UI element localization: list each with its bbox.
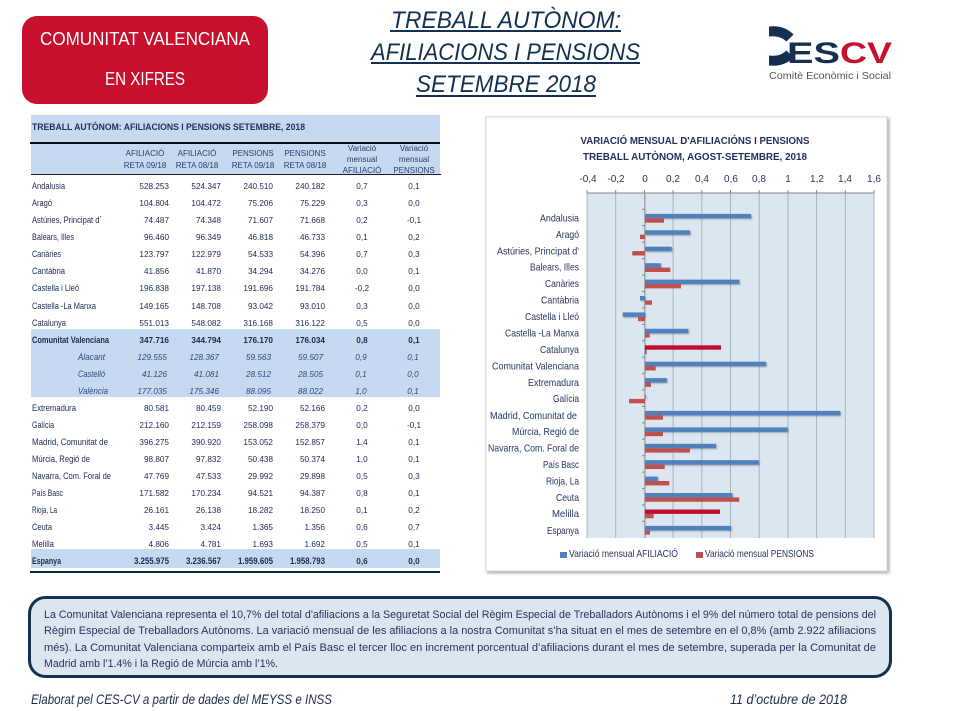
row: Comunitat Valenciana: Comunitat Valenciana (32, 335, 110, 345)
row: Alacant (77, 352, 419, 362)
row: Aragó: 75.229 (300, 199, 325, 208)
category labels: Galícia (553, 393, 579, 405)
row: País Basc: País Basc (32, 488, 63, 498)
category labels (488, 212, 579, 537)
row: Balears (32, 232, 420, 242)
row: País Basc: 94.521 (248, 489, 273, 498)
row: Melilla: Melilla (32, 539, 54, 549)
table column headers: RETA 08/18 (284, 161, 327, 170)
table title band (30, 115, 440, 144)
row: Comunitat Valenciana: 176.170 (243, 336, 273, 345)
highlighted bars: Catalunya and Melilla (645, 345, 721, 514)
row: València: 0,1 (407, 387, 419, 396)
category labels: Rioja, La (546, 476, 579, 488)
plot area with gridlines (587, 190, 874, 538)
category labels: Balears, Illes (530, 262, 579, 274)
row: Astúries: -0,1 (407, 216, 422, 225)
row: Castelló: Castelló (78, 369, 105, 379)
x axis labels: 0,6 (724, 174, 738, 185)
row: Múrcia: 1,0 (356, 455, 368, 464)
row: Astúries: 71.668 (300, 216, 325, 225)
row: Balears: 0,1 (356, 233, 368, 242)
highlight band: Comunitat Valenciana (31, 329, 440, 397)
table column headers: PENSIONS (232, 149, 274, 158)
row: Galícia: Galícia (32, 420, 54, 430)
row: Comunitat Valenciana: 344.794 (191, 336, 221, 345)
row: Aragó (32, 198, 420, 208)
row: Alacant: 0,1 (407, 353, 419, 362)
row: Alacant: 59.563 (246, 353, 271, 362)
row: Canàries: Canàries (32, 249, 61, 259)
row: Comunitat Valenciana: 0,8 (356, 336, 368, 345)
table column headers: AFILIACIÓ (126, 149, 164, 158)
x axis labels: 0,8 (752, 174, 766, 185)
row: Múrcia: Múrcia, Regió de (32, 454, 90, 464)
row: Cantàbria: 0,0 (356, 267, 368, 276)
region badge: Comunitat Valenciana en xifres: COMUNITAT VALENCIANA (40, 29, 250, 49)
logo: CES-CV: ES (787, 37, 840, 70)
logo: CES-CV (766, 31, 892, 82)
row: Balears: Balears, Illes (32, 232, 74, 242)
row: Castella-La Manxa: 93.042 (248, 302, 273, 311)
commentary panel: més). La Comunitat Valenciana comparteix amb el País Basc el tercer lloc en increment porcentual d’afiliacions durant el mes de setembre, superada per la Comunitat de (44, 642, 876, 654)
row: Castella i Lleó: 197.138 (191, 284, 221, 293)
row: Extremadura (32, 403, 420, 413)
row: Espanya: 1.958.793 (290, 556, 325, 566)
region badge: Comunitat Valenciana en xifres: EN XIFRES (105, 69, 185, 89)
x axis labels: 0,2 (666, 174, 680, 185)
category labels: Cantàbria (541, 294, 579, 306)
row: Melilla: 4.781 (200, 540, 221, 549)
row: Andalusia: 240.182 (295, 182, 325, 191)
row: Cantàbria: 0,1 (408, 267, 420, 276)
row: Ceuta (32, 522, 420, 532)
row: Navarra: 29.898 (300, 472, 325, 481)
row: Madrid: 390.920 (191, 438, 221, 447)
row: Castelló: 28.505 (297, 370, 323, 379)
row: Castelló: 41.126 (142, 370, 167, 379)
row: Navarra: Navarra, Com. Foral de (32, 471, 111, 481)
row: Cantàbria: 34.294 (248, 267, 273, 276)
row: Extremadura: 80.581 (144, 404, 169, 413)
row: Aragó: 0,3 (356, 199, 368, 208)
row: Balears: 96.460 (144, 233, 169, 242)
row: Navarra: 29.992 (248, 472, 273, 481)
row: Melilla: 1.693 (252, 540, 273, 549)
category labels: Ceuta (556, 492, 579, 504)
table column headers: Variació (400, 144, 429, 153)
title: AFILIACIONS I PENSIONS (369, 39, 640, 66)
category labels: Madrid, Comunitat de (490, 410, 577, 422)
row: Andalusia: 524.347 (191, 182, 221, 191)
table column headers: mensual (347, 155, 377, 164)
row: Castelló: 0,0 (407, 370, 419, 379)
table column headers: PENSIONS (393, 166, 435, 175)
table column headers: PENSIONS (284, 149, 326, 158)
category labels: Astúries, Principat d' (497, 246, 579, 258)
row: Madrid (32, 437, 420, 447)
row: Balears: 46.733 (300, 233, 325, 242)
row: Rioja: Rioja, La (32, 505, 57, 515)
row: Alacant: Alacant (77, 352, 105, 362)
row: Galícia (32, 420, 422, 430)
row: Castella i Lleó (32, 283, 420, 293)
row: Castella-La Manxa: 93.010 (300, 302, 325, 311)
row: Castelló: 28.512 (245, 370, 271, 379)
row: Canàries (32, 249, 420, 259)
x axis labels (579, 174, 881, 185)
row: Ceuta: Ceuta (32, 522, 52, 532)
row: Galícia: 0,0 (356, 421, 368, 430)
row: Catalunya: 548.082 (191, 319, 221, 328)
row: Extremadura: 80.459 (196, 404, 221, 413)
row: País Basc: 94.387 (300, 489, 325, 498)
title (369, 7, 640, 98)
table column headers: Variació (348, 144, 377, 153)
row: Madrid: 0,1 (408, 438, 420, 447)
row: Cantàbria: Cantàbria (32, 266, 65, 276)
row: Cantàbria (32, 266, 420, 276)
row: Catalunya: 0,5 (356, 319, 368, 328)
row: Canàries: 123.797 (139, 250, 169, 259)
row: País Basc: 170.234 (191, 489, 221, 498)
commentary panel (30, 598, 890, 676)
row: Canàries: 0,3 (408, 250, 420, 259)
row: Navarra: 47.769 (144, 472, 169, 481)
table title band: TREBALL AUTÒNOM: AFILIACIONS I PENSIONS SETEMBRE, 2018 (32, 121, 305, 132)
row: Castella-La Manxa: 149.165 (139, 302, 169, 311)
row: Madrid: 153.052 (243, 438, 273, 447)
category labels: Múrcia, Regió de (512, 426, 579, 438)
row: Rioja (32, 505, 420, 515)
x axis labels: -0,2 (607, 174, 625, 185)
title: TREBALL AUTÒNOM: (391, 7, 621, 34)
row: Cantàbria: 41.856 (144, 267, 169, 276)
row: Galícia: -0,1 (407, 421, 422, 430)
row: Espanya: 0,6 (356, 557, 368, 566)
row: Alacant: 128.367 (189, 353, 219, 362)
row: Galícia: 212.160 (139, 421, 169, 430)
row: Catalunya: 551.013 (139, 319, 169, 328)
row: Aragó: 104.472 (191, 199, 221, 208)
row: Comunitat Valenciana: 0,1 (408, 336, 420, 345)
row: Espanya: 3.255.975 (134, 556, 169, 566)
row: Múrcia: 50.374 (300, 455, 325, 464)
category labels: Comunitat Valenciana (492, 360, 579, 372)
row: Rioja: 18.282 (248, 506, 273, 515)
chart title (580, 134, 810, 163)
row: Ceuta: 0,7 (408, 523, 420, 532)
commentary panel: Règim Especial de Treballadors Autònoms. La variació mensual de les afiliacions a la nostra Comunitat s’ha situat en el mes de setembre en el 0,8% (amb 2.922 afiliacions (44, 625, 876, 637)
row: Melilla: 0,5 (356, 540, 368, 549)
logo: CES-CV: Comitè Econòmic i Social (769, 70, 891, 82)
x axis labels: 1 (785, 174, 791, 185)
row: Balears: 46.818 (248, 233, 273, 242)
row: Ceuta: 1.356 (304, 523, 325, 532)
bar chart panel (486, 117, 887, 571)
row: Rioja: 0,2 (408, 506, 420, 515)
table column headers: mensual (399, 155, 429, 164)
row: Astúries: 74.348 (196, 216, 221, 225)
bars: variació mensual afiliació (623, 214, 840, 530)
row: Andalusia: 0,1 (408, 182, 420, 191)
row: Andalusia: 528.253 (139, 182, 169, 191)
row: Rioja: 26.138 (196, 506, 221, 515)
row: Melilla: 0,1 (408, 540, 420, 549)
row: Ceuta: 0,6 (356, 523, 368, 532)
row: València: València (78, 386, 108, 396)
row: Navarra (32, 471, 420, 481)
row: Astúries (32, 215, 422, 225)
row: València: 1,0 (355, 387, 367, 396)
row: Castella i Lleó: -0,2 (355, 284, 370, 293)
category labels: Castella i Lleó (525, 311, 579, 323)
row: Andalusia (32, 181, 420, 191)
row: Galícia: 258.098 (243, 421, 273, 430)
row: Ceuta: 1.365 (252, 523, 273, 532)
category labels: País Basc (543, 459, 579, 471)
row: Alacant: 59.507 (298, 353, 323, 362)
row: Canàries: 54.533 (248, 250, 273, 259)
x axis labels: -0,4 (579, 174, 597, 185)
row: Andalusia: 0,7 (356, 182, 368, 191)
table column headers: RETA 09/18 (124, 161, 167, 170)
row: Castella-La Manxa: 148.708 (191, 302, 221, 311)
row: Castella i Lleó: 191.696 (243, 284, 273, 293)
row: Navarra: 47.533 (196, 472, 221, 481)
row: Navarra: 0,5 (356, 472, 368, 481)
row: Extremadura: 52.166 (300, 404, 325, 413)
row: Canàries: 0,7 (356, 250, 368, 259)
highlight band: Espanya (31, 549, 440, 568)
row: Espanya: Espanya (32, 556, 62, 566)
row: Extremadura: 52.190 (248, 404, 273, 413)
data table (30, 115, 441, 573)
x axis labels: 0,4 (695, 174, 709, 185)
logo: CES-CV: CV (840, 37, 892, 70)
category labels: Navarra, Com. Foral de (488, 442, 579, 454)
row: Ceuta: 3.424 (200, 523, 221, 532)
row: Astúries: 71.607 (248, 216, 273, 225)
row: Castella-La Manxa: 0,0 (408, 302, 420, 311)
row: País Basc: 0,8 (356, 489, 368, 498)
row: Galícia: 212.159 (191, 421, 221, 430)
row: València: 177.035 (137, 387, 167, 396)
row: Aragó: Aragó (32, 198, 52, 208)
row: Balears: 0,2 (408, 233, 420, 242)
chart title: TREBALL AUTÒNOM, AGOST-SETEMBRE, 2018 (583, 150, 807, 163)
row: Cantàbria: 34.276 (300, 267, 325, 276)
row: Castella-La Manxa: Castella -La Manxa (32, 301, 96, 311)
legend (560, 547, 814, 560)
row: Espanya: 0,0 (408, 557, 420, 566)
row: Catalunya: 0,0 (408, 319, 420, 328)
row: Castelló: 41.081 (194, 370, 219, 379)
category labels: Andalusia (540, 212, 579, 224)
row: Espanya: 3.236.567 (186, 556, 221, 566)
bottom rule (30, 571, 440, 573)
row: Comunitat Valenciana: 176.034 (295, 336, 325, 345)
row: Cantàbria: 41.870 (196, 267, 221, 276)
row: Espanya: 1.959.605 (238, 556, 273, 566)
row: Múrcia: 50.438 (248, 455, 273, 464)
row: Catalunya: Catalunya (32, 318, 66, 328)
row: València: 88.022 (298, 387, 323, 396)
row: Astúries: 74.487 (144, 216, 169, 225)
row: Melilla (32, 539, 420, 549)
row: Navarra: 0,3 (408, 472, 420, 481)
row: Castella i Lleó: 0,0 (408, 284, 420, 293)
row: València: 175.346 (189, 387, 219, 396)
x axis labels: 1,4 (838, 174, 852, 185)
row: Catalunya (32, 318, 420, 328)
row: País Basc: 0,1 (408, 489, 420, 498)
x axis labels: 1,6 (867, 174, 881, 185)
row: Astúries: 0,2 (356, 216, 368, 225)
row: Aragó: 104.804 (139, 199, 169, 208)
footer: date: 11 d’octubre de 2018 (730, 691, 847, 707)
row: Múrcia (32, 454, 420, 464)
category labels: Catalunya (540, 344, 579, 356)
row: Balears: 96.349 (196, 233, 221, 242)
row: Melilla: 4.806 (148, 540, 169, 549)
row: València: 88.095 (246, 387, 271, 396)
table column headers: AFILIACIÓ (178, 149, 216, 158)
row: Madrid: 396.275 (139, 438, 169, 447)
legend: Variació mensual PENSIONS (705, 548, 814, 560)
table column headers: RETA 09/18 (232, 161, 275, 170)
category labels: Castella -La Manxa (505, 328, 579, 340)
row: Alacant: 129.555 (137, 353, 167, 362)
row: Aragó: 0,0 (408, 199, 420, 208)
row: Rioja: 0,1 (356, 506, 368, 515)
category labels: Melilla (552, 508, 579, 520)
row: Comunitat Valenciana: 347.716 (139, 336, 169, 345)
row: Madrid: Madrid, Comunitat de (32, 437, 108, 447)
footer: source: Elaborat pel CES-CV a partir de dades del MEYSS e INSS (31, 691, 333, 707)
legend: Variació mensual AFILIACIÓ (569, 547, 678, 560)
table column headers: RETA 08/18 (176, 161, 219, 170)
category labels: Extremadura (528, 377, 579, 389)
row: Alacant: 0,9 (355, 353, 367, 362)
row: Extremadura: 0,0 (408, 404, 420, 413)
row: Madrid: 1,4 (356, 438, 368, 447)
row: Castella i Lleó: 191.784 (295, 284, 325, 293)
row: Castella-La Manxa: 0,3 (356, 302, 368, 311)
row: Catalunya: 316.168 (243, 319, 273, 328)
bars: variació mensual pensions (629, 218, 739, 535)
row: Comunitat Valenciana (32, 335, 420, 345)
region badge: Comunitat Valenciana en xifres (22, 16, 268, 104)
row: Castelló: 0,1 (355, 370, 367, 379)
row: Rioja: 18.250 (300, 506, 325, 515)
row: Castella-La Manxa (32, 301, 420, 311)
row: Andalusia: 240.510 (243, 182, 273, 191)
category labels: Canàries (545, 278, 579, 290)
row: Galícia: 258.379 (295, 421, 325, 430)
row: Múrcia: 98.807 (144, 455, 169, 464)
x axis labels: 0 (642, 174, 648, 185)
row: Canàries: 54.396 (300, 250, 325, 259)
chart frame (486, 117, 887, 571)
row: Castella i Lleó: Castella i Lleó (32, 283, 79, 293)
category labels: Espanya (547, 525, 579, 537)
table column headers (31, 144, 441, 175)
row: País Basc (32, 488, 420, 498)
row: Canàries: 122.979 (191, 250, 221, 259)
row: Catalunya: 316.122 (295, 319, 325, 328)
row: Castella i Lleó: 196.838 (139, 284, 169, 293)
row: Aragó: 75.206 (248, 199, 273, 208)
row: Astúries: Astúries, Principat d´ (32, 215, 102, 225)
row: Espanya (32, 556, 420, 566)
row: Ceuta: 3.445 (148, 523, 169, 532)
commentary panel: La Comunitat Valenciana representa el 10,7% del total d'afiliacions a la Seguretat Social del Règim Especial de Treballadors Autònoms i el 9% del número total de pensions del (44, 609, 876, 621)
row: País Basc: 171.582 (139, 489, 169, 498)
row: València (78, 386, 419, 396)
row: Múrcia: 0,1 (408, 455, 420, 464)
table column headers: AFILIACIÓ (343, 166, 381, 175)
row: Madrid: 152.857 (295, 438, 325, 447)
row: Andalusia: Andalusia (32, 181, 65, 191)
commentary panel: Madrid amb l’1.4% i la Regió de Múrcia amb l’1%. (44, 658, 278, 670)
row: Rioja: 26.161 (144, 506, 169, 515)
row: Extremadura: Extremadura (32, 403, 76, 413)
title: SETEMBRE 2018 (416, 71, 597, 98)
x axis labels: 1,2 (810, 174, 824, 185)
category labels: Aragó (556, 229, 579, 241)
row: Múrcia: 97.832 (196, 455, 221, 464)
chart title: VARIACIÓ MENSUAL D'AFILIACIÓNS I PENSIONS (580, 134, 810, 147)
row: Extremadura: 0,2 (356, 404, 368, 413)
row: Castelló (78, 369, 419, 379)
row: Melilla: 1.692 (304, 540, 325, 549)
